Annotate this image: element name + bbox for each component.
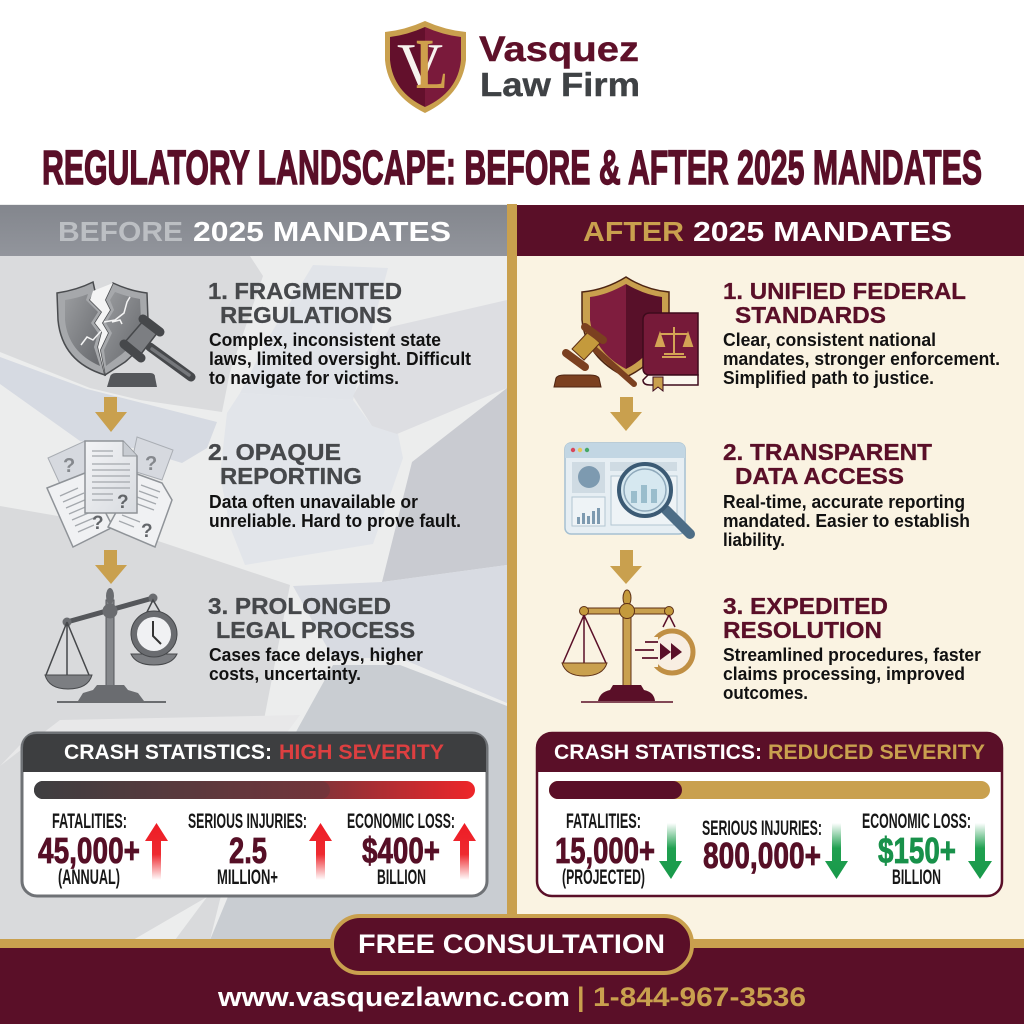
- item text: prolonged legal process: LEGAL PROCESS: [216, 617, 415, 643]
- stat: fatalities: 45,000+: [38, 830, 140, 871]
- card header: HIGH SEVERITY: [279, 741, 444, 764]
- icon: question mark documents: ?: [145, 453, 157, 475]
- call to action pill: [332, 916, 692, 973]
- stat: fatalities: FATALITIES:: [52, 810, 127, 833]
- before header: [0, 205, 507, 256]
- card header: [23, 734, 486, 772]
- icon: question mark documents: ?: [117, 492, 129, 513]
- icon: question mark documents: [47, 437, 173, 547]
- logo wordmark: Vasquez: [479, 30, 639, 69]
- arrow: step 2 to 3: [610, 550, 642, 584]
- item text: prolonged legal process: [208, 593, 423, 684]
- item text: transparent data access: liability.: [723, 530, 785, 550]
- icon: question mark documents: ?: [92, 513, 104, 534]
- stat: fatalities: [38, 810, 140, 889]
- panel: before 2025 mandates: [0, 204, 507, 940]
- icon: scale with fast-forward clock: [562, 590, 693, 702]
- contact line: www.vasquezlawnc.com: [217, 982, 570, 1012]
- item text: transparent data access: mandated. Easier to establish: [723, 511, 970, 531]
- after header: [517, 205, 1024, 256]
- stat: economic loss: BILLION: [892, 866, 941, 889]
- stat: serious injuries: [702, 817, 822, 876]
- item text: expedited resolution: RESOLUTION: [723, 617, 882, 643]
- stat: serious injuries: MILLION+: [217, 866, 278, 889]
- stat: economic loss: $400+: [362, 830, 440, 871]
- logo wordmark: Law Firm: [480, 66, 640, 103]
- item text: fragmented regulations: laws, limited oversight. Difficult: [209, 349, 471, 369]
- stat: economic loss: ECONOMIC LOSS:: [347, 810, 455, 833]
- stat: serious injuries: SERIOUS INJURIES:: [702, 817, 822, 840]
- item text: prolonged legal process: Cases face delays, higher: [209, 645, 423, 665]
- contact line: [217, 982, 806, 1012]
- arrow: fatalities up: [145, 823, 168, 880]
- icon: VL shield: V: [397, 30, 443, 101]
- icon: broken shield and gavel: [57, 282, 191, 387]
- stat: fatalities: (ANNUAL): [58, 866, 120, 889]
- call to action pill: FREE CONSULTATION: [358, 929, 665, 959]
- item text: opaque reporting: unreliable. Hard to prove fault.: [209, 511, 461, 531]
- item text: transparent data access: DATA ACCESS: [735, 463, 904, 489]
- icon: shield, gavel and law book: [554, 277, 698, 391]
- panel background shards: [0, 204, 507, 940]
- logo: Vasquez Law Firm: [385, 21, 640, 113]
- card header: [537, 733, 1002, 772]
- icon: scale with clock: [45, 588, 177, 702]
- item text: unified federal standards: 1. UNIFIED FEDERAL: [723, 278, 966, 304]
- item text: fragmented regulations: [208, 278, 471, 388]
- stat: economic loss: [347, 810, 455, 889]
- arrow: injuries up: [309, 823, 332, 880]
- item text: unified federal standards: mandates, stronger enforcement.: [723, 349, 1000, 369]
- item text: fragmented regulations: to navigate for victims.: [209, 368, 399, 388]
- item text: transparent data access: [723, 439, 970, 550]
- contact line: 1-844-967-3536: [593, 982, 806, 1012]
- stat: economic loss: [862, 810, 971, 889]
- item text: unified federal standards: Clear, consistent national: [723, 330, 936, 350]
- item text: prolonged legal process: 3. PROLONGED: [208, 593, 391, 619]
- item text: expedited resolution: 3. EXPEDITED: [723, 593, 888, 619]
- item text: opaque reporting: 2. OPAQUE: [208, 439, 341, 465]
- item text: fragmented regulations: Complex, inconsistent state: [209, 330, 441, 350]
- icon: VL shield: L: [416, 24, 447, 104]
- stat: fatalities: 15,000+: [555, 830, 655, 871]
- card header: CRASH STATISTICS:: [554, 741, 762, 764]
- center divider: [507, 204, 517, 940]
- contact line: |: [577, 982, 585, 1012]
- item text: unified federal standards: Simplified path to justice.: [723, 368, 934, 388]
- card header: REDUCED SEVERITY: [768, 741, 985, 764]
- severity bar: [34, 781, 475, 799]
- item text: opaque reporting: Data often unavailable or: [209, 492, 418, 512]
- arrow: step 2 to 3: [95, 550, 127, 584]
- item text: expedited resolution: Streamlined procedures, faster: [723, 645, 981, 665]
- stat: fatalities: [555, 810, 655, 889]
- item text: prolonged legal process: costs, uncertainty.: [209, 664, 361, 684]
- icon: data dashboard with magnifier: [565, 443, 690, 534]
- logo wordmark: [479, 30, 640, 103]
- after header: AFTER: [583, 216, 684, 247]
- crash statistics card: high severity: [22, 733, 487, 896]
- item text: transparent data access: 2. TRANSPARENT: [723, 439, 933, 465]
- item text: fragmented regulations: REGULATIONS: [220, 302, 392, 328]
- item text: unified federal standards: STANDARDS: [735, 302, 886, 328]
- severity bar: [549, 781, 990, 799]
- stat: economic loss: BILLION: [377, 866, 426, 889]
- icon: VL shield: [385, 21, 466, 113]
- footer band: [0, 916, 1024, 1024]
- stat: fatalities: (PROJECTED): [562, 866, 645, 889]
- item text: unified federal standards: [723, 278, 1000, 388]
- arrow: economic loss up: [453, 823, 476, 880]
- arrow: economic loss down: [968, 823, 992, 879]
- stat: serious injuries: SERIOUS INJURIES:: [188, 810, 307, 833]
- arrow: step 1 to 2: [610, 397, 642, 431]
- item text: opaque reporting: REPORTING: [220, 463, 362, 489]
- stat: serious injuries: 2.5: [229, 830, 267, 871]
- arrow: fatalities down: [659, 823, 682, 879]
- arrow: injuries down: [825, 823, 848, 879]
- panel: after 2025 mandates: [517, 205, 1024, 940]
- item text: expedited resolution: claims processing, improved: [723, 664, 965, 684]
- item text: transparent data access: Real-time, accurate reporting: [723, 492, 965, 512]
- icon: question mark documents: ?: [141, 521, 153, 542]
- item text: expedited resolution: [723, 593, 981, 703]
- stat: serious injuries: [188, 810, 307, 889]
- stat: fatalities: FATALITIES:: [566, 810, 641, 833]
- before header: 2025 MANDATES: [193, 216, 451, 247]
- stat: economic loss: $150+: [878, 830, 956, 871]
- after header: 2025 MANDATES: [693, 216, 952, 247]
- before header: BEFORE: [58, 216, 183, 247]
- item text: expedited resolution: outcomes.: [723, 683, 808, 703]
- crash statistics card: reduced severity: [537, 733, 1002, 896]
- stat: serious injuries: 800,000+: [703, 835, 821, 876]
- arrow: step 1 to 2: [95, 397, 127, 432]
- after panel background: [517, 205, 1024, 940]
- item text: opaque reporting: [208, 439, 461, 531]
- item text: fragmented regulations: 1. FRAGMENTED: [208, 278, 402, 304]
- card header: CRASH STATISTICS:: [64, 741, 272, 764]
- icon: question mark documents: ?: [63, 455, 75, 477]
